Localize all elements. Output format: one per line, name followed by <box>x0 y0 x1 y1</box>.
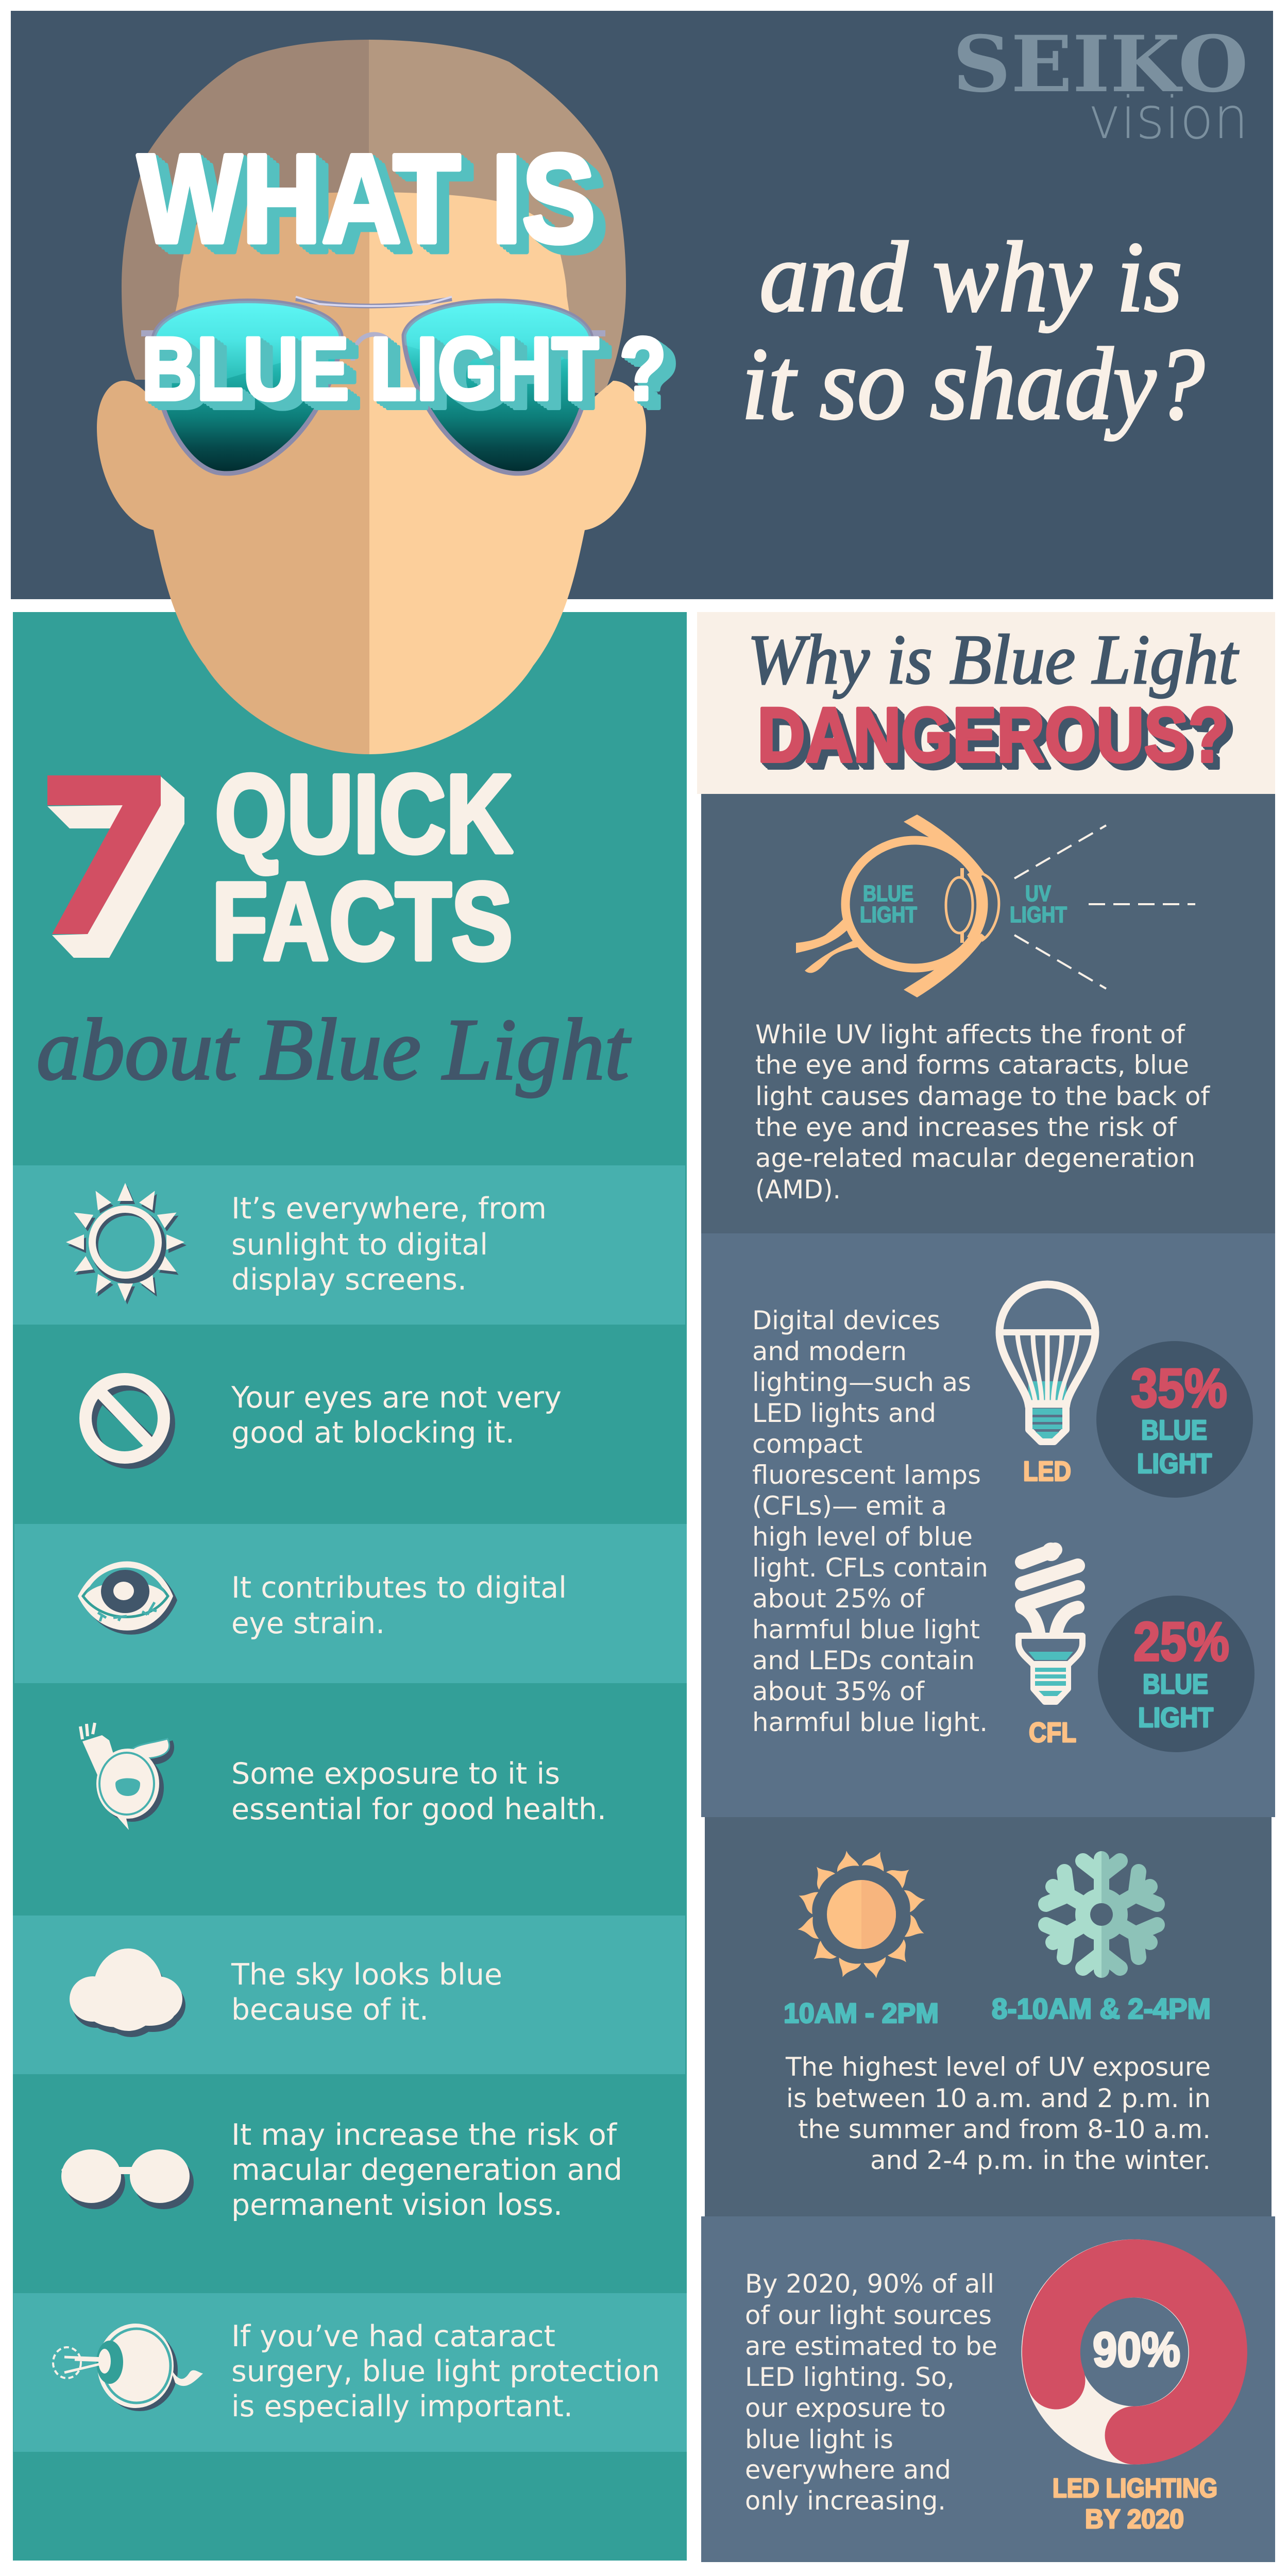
icon: cloud <box>70 1948 185 2037</box>
label: summer hours: 10AM - 2PM <box>784 1998 939 2029</box>
chart: 90 percent donut <box>1050 2268 1218 2435</box>
text: uv exposure: and 2-4 p.m. in the winter. <box>870 2145 1211 2175</box>
text: digital devices: harmful blue light <box>752 1615 980 1645</box>
subtitle: and why is it so shady: and why is <box>759 222 1182 333</box>
fact text 6: macular degeneration and <box>231 2153 622 2187</box>
subtitle: and why is it so shady: it so shady? <box>741 327 1205 441</box>
text: uv exposure <box>785 2052 1211 2175</box>
text: uv vs blue light: the eye and increases the risk of <box>755 1112 1177 1142</box>
uv rays dashed lines <box>1014 825 1195 989</box>
stat: 25 percent blue light: LIGHT <box>1138 1702 1213 1733</box>
stat: 25 percent blue light <box>1098 1596 1255 1752</box>
heading: quick facts: QUICK <box>215 751 513 876</box>
heading: quick facts: FACTS <box>212 860 513 983</box>
heading box: Why is Blue Light <box>748 620 1239 699</box>
text: digital devices: compact <box>752 1429 862 1459</box>
fact text 7: is especially important. <box>231 2389 573 2424</box>
icon: prohibition sign <box>86 1379 169 1463</box>
fact text 2: Your eyes are not very <box>231 1381 562 1415</box>
fact text 3 <box>231 1571 567 1640</box>
label: led lighting by 2020: BY 2020 <box>1085 2504 1184 2534</box>
text: by 2020: LED lighting. So, <box>745 2362 955 2392</box>
fact text 4 <box>231 1757 606 1826</box>
sub-panel: led and cfl <box>701 1233 1275 1817</box>
text: digital devices: harmful blue light. <box>752 1707 988 1737</box>
stat: 25 percent blue light: 25% <box>1133 1611 1229 1672</box>
text: digital devices: (CFLs)— emit a <box>752 1491 947 1521</box>
label: cfl: CFL <box>1029 1717 1076 1748</box>
label: led lighting by 2020: LED LIGHTING <box>1053 2473 1217 2503</box>
text: uv vs blue light: While UV light affects the front of <box>755 1020 1185 1049</box>
fact text 3: eye strain. <box>231 1606 385 1640</box>
logo: seiko vision header <box>953 19 1248 152</box>
title: what is blue light: WHAT IS <box>138 128 596 269</box>
logo: seiko vision header: vision <box>1088 85 1248 152</box>
title: what is blue light <box>138 128 666 418</box>
fact row 1 background <box>13 1165 685 1325</box>
text: digital devices: lighting—such as <box>752 1367 971 1397</box>
text: digital devices: and LEDs contain <box>752 1646 975 1675</box>
sub-panel: led lighting by 2020 <box>701 2216 1275 2562</box>
icon: eye cross-section <box>796 815 999 997</box>
stat: 35 percent blue light <box>1096 1341 1253 1498</box>
fact text 6 <box>231 2118 622 2222</box>
label: uv light: UV <box>1025 881 1052 906</box>
logo: seiko vision header: SEIKO <box>953 19 1248 110</box>
aviator sunglasses <box>141 289 605 473</box>
icon: cfl bulb <box>1019 1547 1082 1702</box>
text: digital devices: LED lights and <box>752 1398 936 1428</box>
text: digital devices: Digital devices <box>752 1306 940 1335</box>
icon: led bulb <box>999 1284 1095 1442</box>
heading box <box>697 612 1275 794</box>
fact text 7 <box>231 2319 660 2424</box>
heading: big number 7 <box>47 775 184 958</box>
label: uv light <box>1010 881 1067 927</box>
fact row 5 background <box>13 1916 685 2074</box>
fact text 3: It contributes to digital <box>231 1571 567 1605</box>
text: uv vs blue light <box>755 1020 1210 1205</box>
icon: strained eye <box>78 1561 177 1635</box>
label: led: LED <box>1023 1456 1071 1487</box>
text: by 2020: everywhere and <box>745 2455 951 2485</box>
text: uv exposure: is between 10 a.m. and 2 p.m. in <box>786 2083 1211 2113</box>
fact text 6: permanent vision loss. <box>231 2188 563 2222</box>
face <box>154 192 585 754</box>
panel: hero header <box>11 11 1273 754</box>
icon: sunglasses <box>61 2149 194 2209</box>
sub-panel: uv versus blue light <box>701 794 1275 1233</box>
icon: snowflake <box>1046 1859 1157 1970</box>
text: digital devices <box>752 1306 988 1737</box>
text: by 2020: our exposure to <box>745 2393 946 2423</box>
label: blue light inside eye: BLUE <box>863 881 913 906</box>
text: by 2020: By 2020, 90% of all <box>745 2269 994 2299</box>
hair <box>122 40 626 394</box>
text: by 2020: are estimated to be <box>745 2331 997 2361</box>
fact text 7: surgery, blue light protection <box>231 2354 660 2388</box>
fact text 2 <box>231 1381 562 1450</box>
heading: about blue light: about Blue Light <box>37 1001 631 1098</box>
text: digital devices: high level of blue <box>752 1522 973 1552</box>
text: digital devices: light. CFLs contain <box>752 1553 988 1583</box>
text: uv vs blue light: the eye and forms cataracts, blue <box>755 1050 1189 1080</box>
text: uv vs blue light: age-related macular degeneration <box>755 1143 1195 1173</box>
stat: 35 percent blue light: 35% <box>1131 1357 1227 1419</box>
fact text 5: because of it. <box>231 1993 429 2027</box>
panel: 7 quick facts <box>13 612 687 2561</box>
text: digital devices: fluorescent lamps <box>752 1460 981 1490</box>
title: what is blue light: BLUE LIGHT ? <box>142 319 666 418</box>
stat: 35 percent blue light: LIGHT <box>1137 1448 1212 1479</box>
fact text 5: The sky looks blue <box>231 1958 502 1992</box>
subtitle: and why is it so shady <box>741 222 1205 441</box>
stat: 25 percent blue light: BLUE <box>1143 1669 1208 1700</box>
fact row 7 background <box>13 2293 687 2452</box>
icon: summer sun <box>795 1848 928 1981</box>
label: uv light: LIGHT <box>1010 902 1067 927</box>
text: by 2020: blue light is <box>745 2425 893 2454</box>
icon: sun <box>66 1183 187 1304</box>
icon: eye with surgical tool <box>53 2324 203 2411</box>
label: blue light inside eye <box>860 881 917 927</box>
fact text 1: sunlight to digital <box>231 1228 488 1262</box>
text: uv exposure: The highest level of UV exposure <box>785 2052 1211 2082</box>
text: digital devices: and modern <box>752 1336 907 1366</box>
panel background: teal <box>13 612 687 2561</box>
fact text 1 <box>231 1192 547 1297</box>
ears <box>97 381 646 530</box>
text: uv vs blue light: light causes damage to the back of <box>755 1081 1210 1111</box>
fact text 2: good at blocking it. <box>231 1416 515 1450</box>
stat: 35 percent blue light: BLUE <box>1141 1415 1207 1446</box>
text: by 2020: of our light sources <box>745 2300 992 2330</box>
fact text 4: essential for good health. <box>231 1792 606 1826</box>
text: uv exposure: the summer and from 8-10 a.m. <box>798 2114 1211 2144</box>
sub-panel: uv exposure hours <box>705 1817 1272 2216</box>
heading: quick facts <box>212 751 513 983</box>
text: by 2020: only increasing. <box>745 2486 946 2516</box>
illustration: face with aviators <box>97 40 646 754</box>
label: led lighting by 2020 <box>1053 2473 1217 2534</box>
text: digital devices: about 35% of <box>752 1676 925 1706</box>
fact text 1: It’s everywhere, from <box>231 1192 547 1226</box>
fact text 4: Some exposure to it is <box>231 1757 560 1791</box>
text: by 2020 <box>745 2269 997 2516</box>
fact text 6: It may increase the risk of <box>231 2118 618 2152</box>
fact row 3 background <box>14 1524 687 1683</box>
text: uv vs blue light: (AMD). <box>755 1175 841 1205</box>
text: digital devices: about 25% of <box>752 1584 925 1614</box>
panel: why is blue light dangerous <box>697 612 1275 2562</box>
icon: apple and carrot <box>80 1723 174 1830</box>
label: blue light inside eye: LIGHT <box>860 902 917 927</box>
fact text 5 <box>231 1958 502 2027</box>
fact text 7: If you’ve had cataract <box>231 2319 555 2353</box>
chart: 90 percent donut: 90% <box>1093 2323 1180 2377</box>
hero background <box>11 11 1273 599</box>
label: winter hours: 8-10AM & 2-4PM <box>992 1992 1211 2025</box>
fact text 1: display screens. <box>231 1263 467 1297</box>
